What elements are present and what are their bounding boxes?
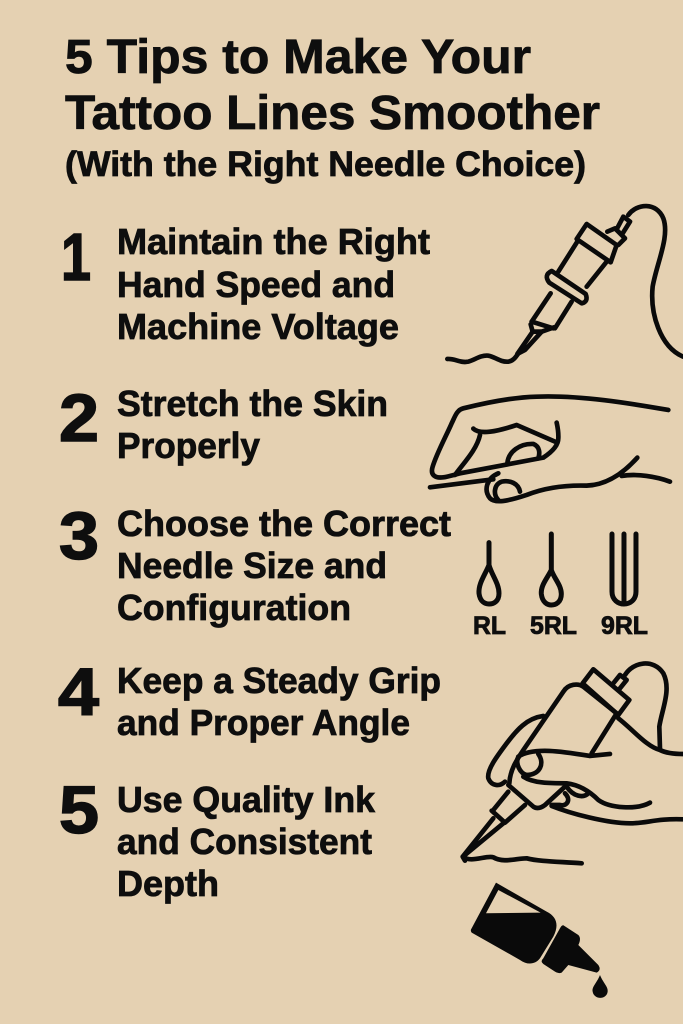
tip 5: Use Quality Ink [117,779,376,820]
tip 1: Hand Speed and [117,264,395,305]
icon: 5RL needle [541,534,561,605]
tip 2 [59,381,388,466]
tip 3 [59,499,451,628]
subtitle: (With the Right Needle Choice) [65,145,586,184]
icon: hand gripping machine [463,663,683,863]
tip 4: Keep a Steady Grip [117,660,441,701]
tip 2: 2 [59,381,99,456]
needle labels: 5RL [530,612,577,640]
needle labels: RL [473,612,506,640]
tip 3: Choose the Correct [117,503,451,544]
tip 1: Maintain the Right [117,221,430,262]
title [65,31,600,140]
tip 4: 4 [58,655,99,730]
tip 3: Configuration [117,587,351,628]
tip 3: 3 [59,499,99,574]
tip 2: Properly [117,425,260,466]
tip 1 [61,220,430,347]
needle labels [473,612,648,640]
tip 4: and Proper Angle [117,702,410,743]
icon: tattoo machine drawing a line [447,206,683,362]
tip 5 [59,773,376,904]
tip 1: 1 [61,220,91,295]
needle diagrams [473,534,648,640]
tip 5: Depth [117,863,219,904]
tip 3: Needle Size and [117,545,387,586]
needle labels: 9RL [601,612,648,640]
tip 2: Stretch the Skin [117,383,388,424]
icon: 9RL needle [612,534,636,604]
title: 5 Tips to Make Your [65,31,531,84]
tip 5: 5 [59,773,99,848]
tip 4 [58,655,441,743]
tip 5: and Consistent [117,821,372,862]
icon: ink bottle with drop [471,883,608,998]
tip 1: Machine Voltage [117,306,399,347]
icon: RL needle [479,543,499,604]
title: Tattoo Lines Smoother [65,87,600,140]
icon: hand stretching skin [430,396,670,501]
